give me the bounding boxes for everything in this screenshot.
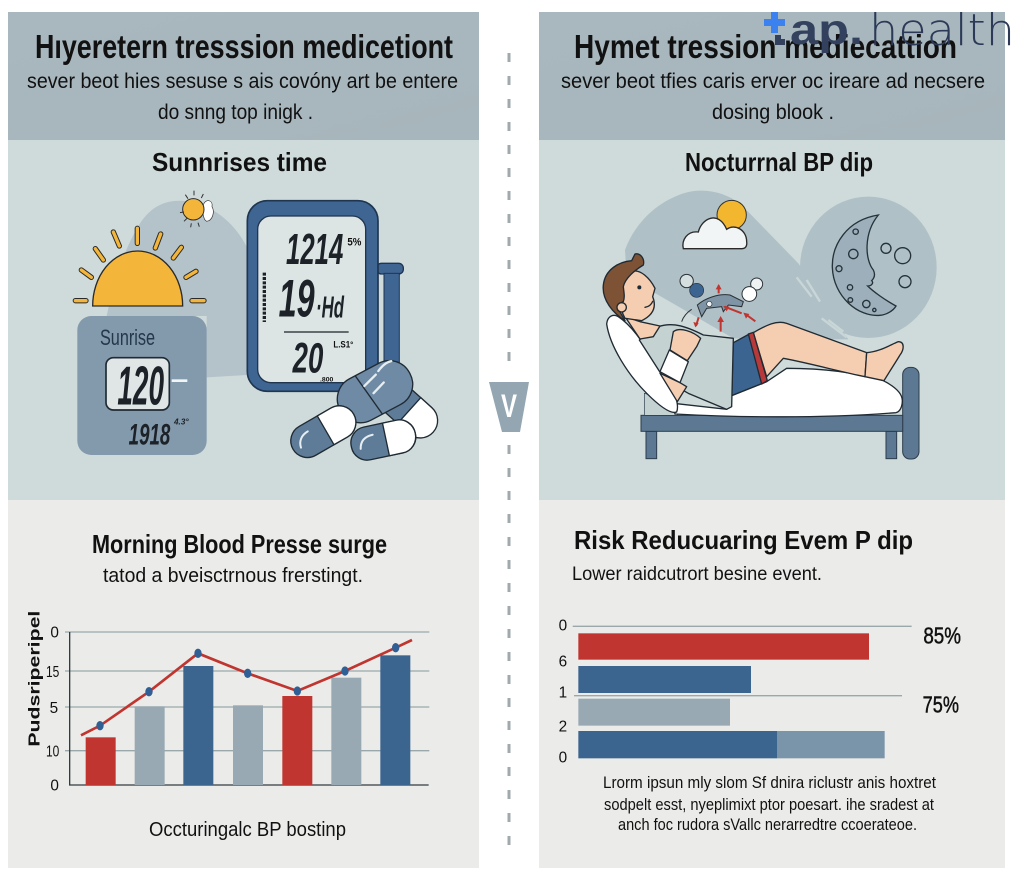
- icon: sun behind cloud: [683, 200, 747, 249]
- paragraph: risk reduction note: [603, 774, 936, 834]
- card: sunrise reading: 4.3°: [173, 417, 189, 427]
- patient figure: [603, 254, 903, 409]
- card: sunrise reading: 120: [117, 354, 164, 416]
- panel: left column morning dosing: [8, 12, 479, 868]
- heading: risk reduction: Risk Reducuaring Evem P dip: [574, 525, 913, 555]
- horizontal bar chart: risk reduction: 0: [559, 749, 567, 766]
- paragraph: risk reduction note: anch foc rudora sVallc nerarredtre ccoerateoe.: [618, 816, 917, 834]
- horizontal bar chart: risk reduction: 75%: [923, 691, 959, 717]
- icon: blood pressure monitor: [247, 201, 403, 391]
- icon: crescent moon: [832, 215, 911, 315]
- bar and line chart: morning surge: 0: [50, 625, 59, 642]
- right header band: Hymet tression mediecattion: [574, 28, 957, 65]
- icon: circulation diagram with red arrows: [680, 274, 763, 332]
- logo: tap.health: ap.: [790, 6, 863, 54]
- right header band: sever beot tfies caris erver oc ireare ad necsere: [561, 70, 985, 93]
- paragraph: risk reduction note: Lrorm ipsun mly slom Sf dnira riclustr anis hoxtret: [603, 774, 936, 792]
- right header band: dosing blook .: [712, 101, 834, 124]
- dashed divider with versus badge: [489, 53, 529, 847]
- card: sunrise reading: 1918: [129, 419, 171, 452]
- icon: blood pressure monitor: .800: [320, 376, 334, 383]
- card: sunrise reading: Sunrise: [100, 325, 155, 350]
- icon: rising sun: [75, 228, 204, 306]
- bar and line chart: morning surge: [27, 611, 429, 795]
- icon: small sun with cloud: [180, 191, 213, 227]
- subheading: risk reduction: Lower raidcutrort besine event.: [572, 564, 822, 585]
- left header band: [8, 12, 479, 140]
- left header band: sever beot hies sesuse s ais covóny art be entere: [27, 70, 458, 93]
- icon: blood pressure monitor: L.S1°: [333, 339, 354, 349]
- illustration: sunrise, monitor and pills: [75, 191, 445, 464]
- logo: tap.health: health: [869, 5, 1015, 56]
- heading: morning surge: Morning Blood Presse surge: [92, 529, 387, 559]
- icon: blood pressure monitor: 20: [292, 335, 324, 383]
- logo: tap.health: [764, 5, 1015, 56]
- under-mattress shadow: [644, 393, 677, 415]
- bar and line chart: morning surge: 5: [50, 700, 58, 717]
- icon: pills: [285, 353, 445, 464]
- icon: blood pressure monitor: 1214: [286, 226, 343, 274]
- left header band: do snng top inigk .: [158, 101, 313, 124]
- subheading: morning surge: tatod a bveisctrnous frerstingt.: [103, 565, 363, 587]
- chart caption: morning surge: Occturingalc BP bostinp: [149, 819, 346, 841]
- bar and line chart: morning surge: 15: [46, 664, 59, 681]
- horizontal bar chart: risk reduction: 6: [559, 654, 567, 671]
- bed frame: [641, 367, 919, 459]
- dashed divider with versus badge: V: [501, 388, 517, 424]
- blanket: [673, 368, 902, 417]
- left header band: Hıyeretern tresssion medicetiont: [35, 28, 453, 65]
- heading: sunrise time: Sunnrises time: [152, 147, 327, 177]
- icon: blood pressure monitor: ·Hd: [316, 290, 345, 324]
- illustration: patient lying in bed at night: [603, 191, 937, 459]
- heading: nocturnal dip: Nocturrnal BP dip: [685, 147, 873, 177]
- icon: blood pressure monitor: 19: [279, 270, 315, 329]
- bar and line chart: morning surge: Pudsriperipel: [27, 611, 44, 747]
- paragraph: risk reduction note: sodpelt esst, nyeplimixt ptor poesart. ihe sradest at: [604, 796, 934, 814]
- horizontal bar chart: risk reduction: [559, 618, 961, 766]
- panel: right column evening dosing: [539, 12, 1005, 868]
- horizontal bar chart: risk reduction: 85%: [923, 622, 961, 648]
- icon: blood pressure monitor: 5%: [347, 236, 362, 248]
- horizontal bar chart: risk reduction: 2: [559, 719, 567, 736]
- bar and line chart: morning surge: 10: [46, 743, 59, 760]
- horizontal bar chart: risk reduction: 1: [559, 685, 567, 702]
- horizontal bar chart: risk reduction: 0: [559, 618, 567, 635]
- card: sunrise reading: [77, 316, 207, 455]
- bar and line chart: morning surge: 0: [50, 778, 59, 795]
- pillow: [607, 315, 677, 412]
- right header band: [539, 12, 1005, 140]
